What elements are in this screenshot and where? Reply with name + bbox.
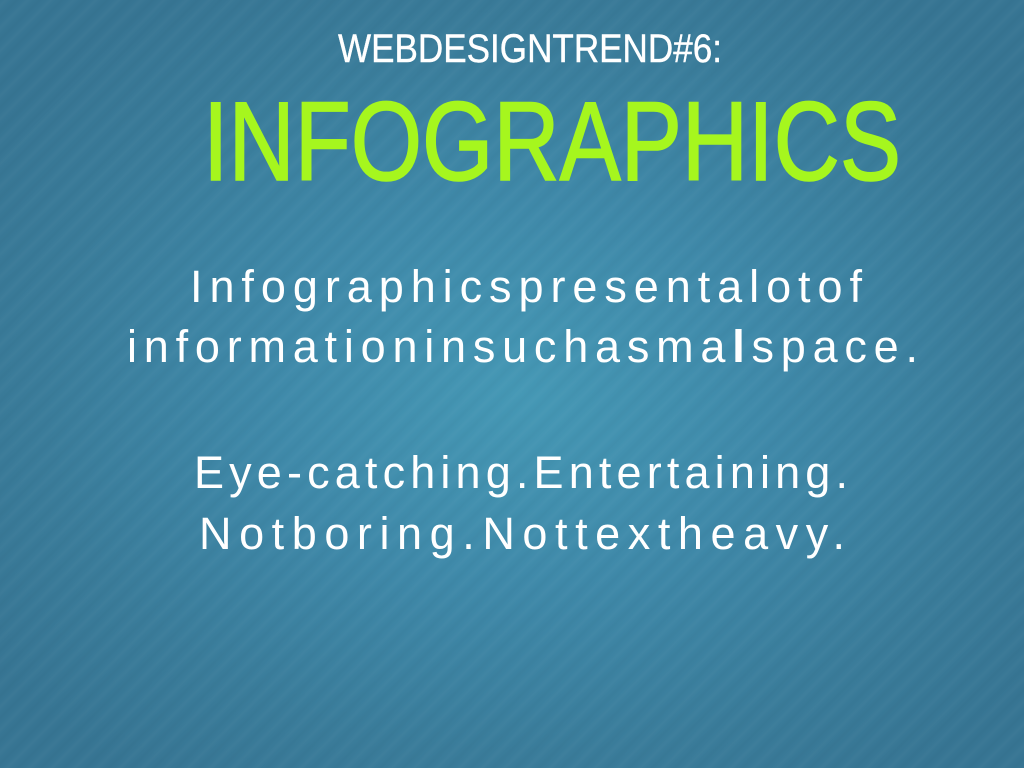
eyebrow heading: WEBDESIGNTREND#6: <box>338 27 722 71</box>
text block: description <box>127 261 918 372</box>
text block: qualities: Eye-catching.Entertaining. <box>194 447 848 498</box>
text block: description: informationinsuchasmalspace. <box>127 321 918 372</box>
text block: qualities <box>194 447 848 559</box>
text block: description: Infographicspresentalotof <box>190 261 862 312</box>
text block: qualities: Notboring.Nottextheavy. <box>199 508 845 559</box>
